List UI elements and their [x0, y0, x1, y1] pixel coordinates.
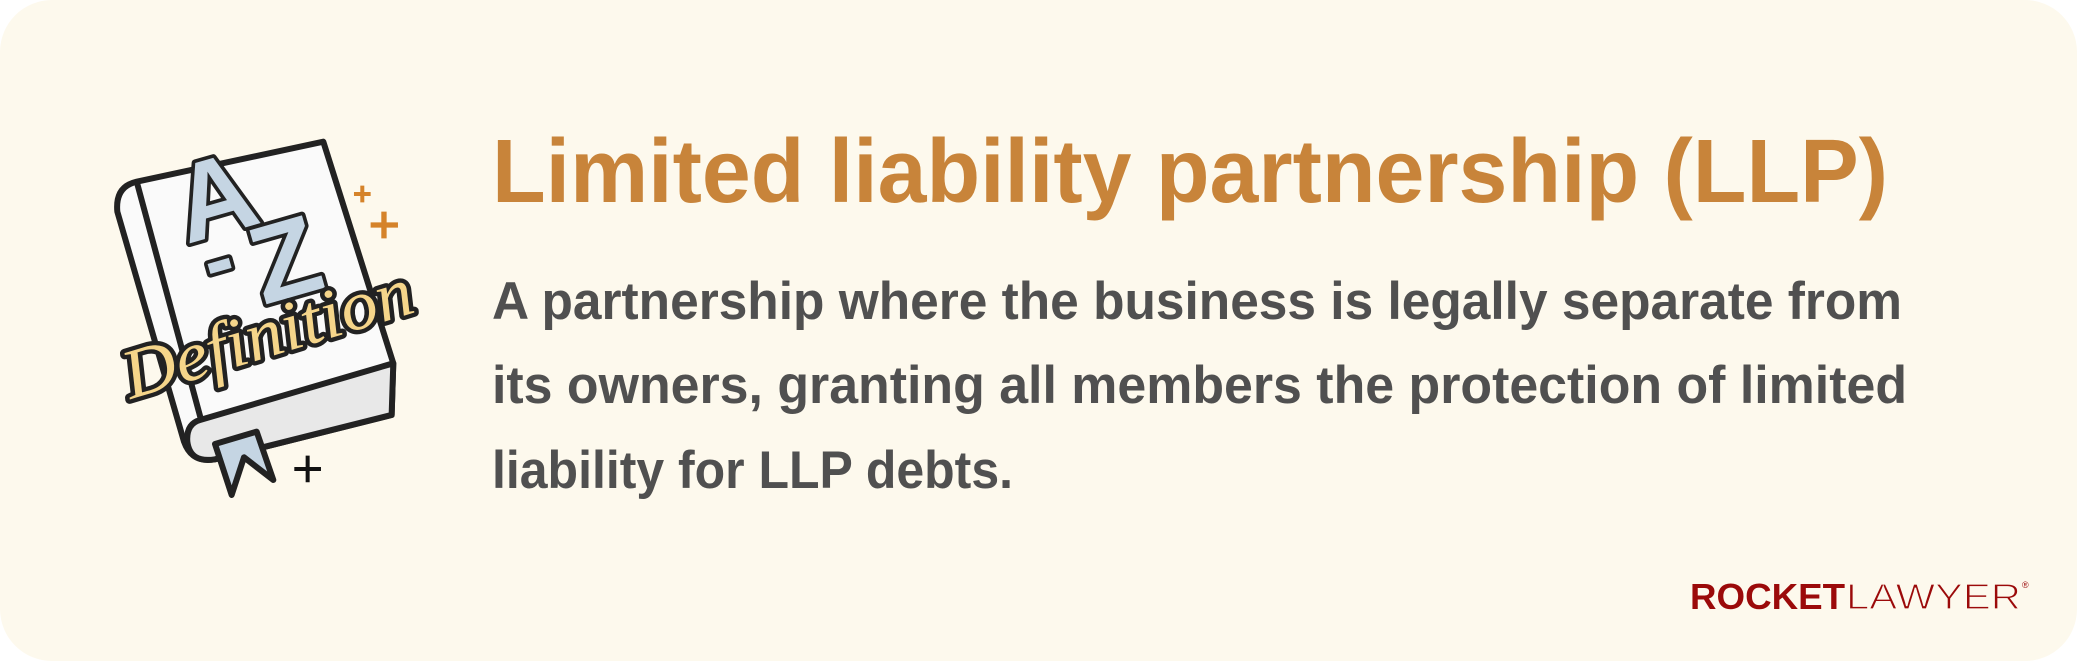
icon: sparkles [354, 186, 371, 202]
icon: letters A-Z: Z [236, 191, 335, 328]
logo: Rocket Lawyer: ® [2022, 580, 2029, 590]
title: Limited liability partnership (LLP) [492, 122, 1888, 222]
logo: Rocket Lawyer [1690, 576, 2029, 617]
icon: letters A-Z [160, 127, 335, 328]
icon: letters A-Z: - [191, 210, 245, 310]
logo: Rocket Lawyer: LAWYER [1846, 576, 2021, 617]
icon: definition book [112, 127, 422, 495]
body text [492, 272, 1907, 500]
icon: Definition script: Definition [112, 253, 422, 415]
icon: letters A-Z: A [160, 127, 270, 267]
body text: A partnership where the business is legally separate from [492, 272, 1902, 331]
body text: its owners, granting all members the protection of limited [492, 356, 1907, 415]
logo: Rocket Lawyer: ROCKET [1690, 576, 1845, 617]
icon: bookmark [215, 432, 273, 495]
body text: liability for LLP debts. [492, 441, 1013, 500]
